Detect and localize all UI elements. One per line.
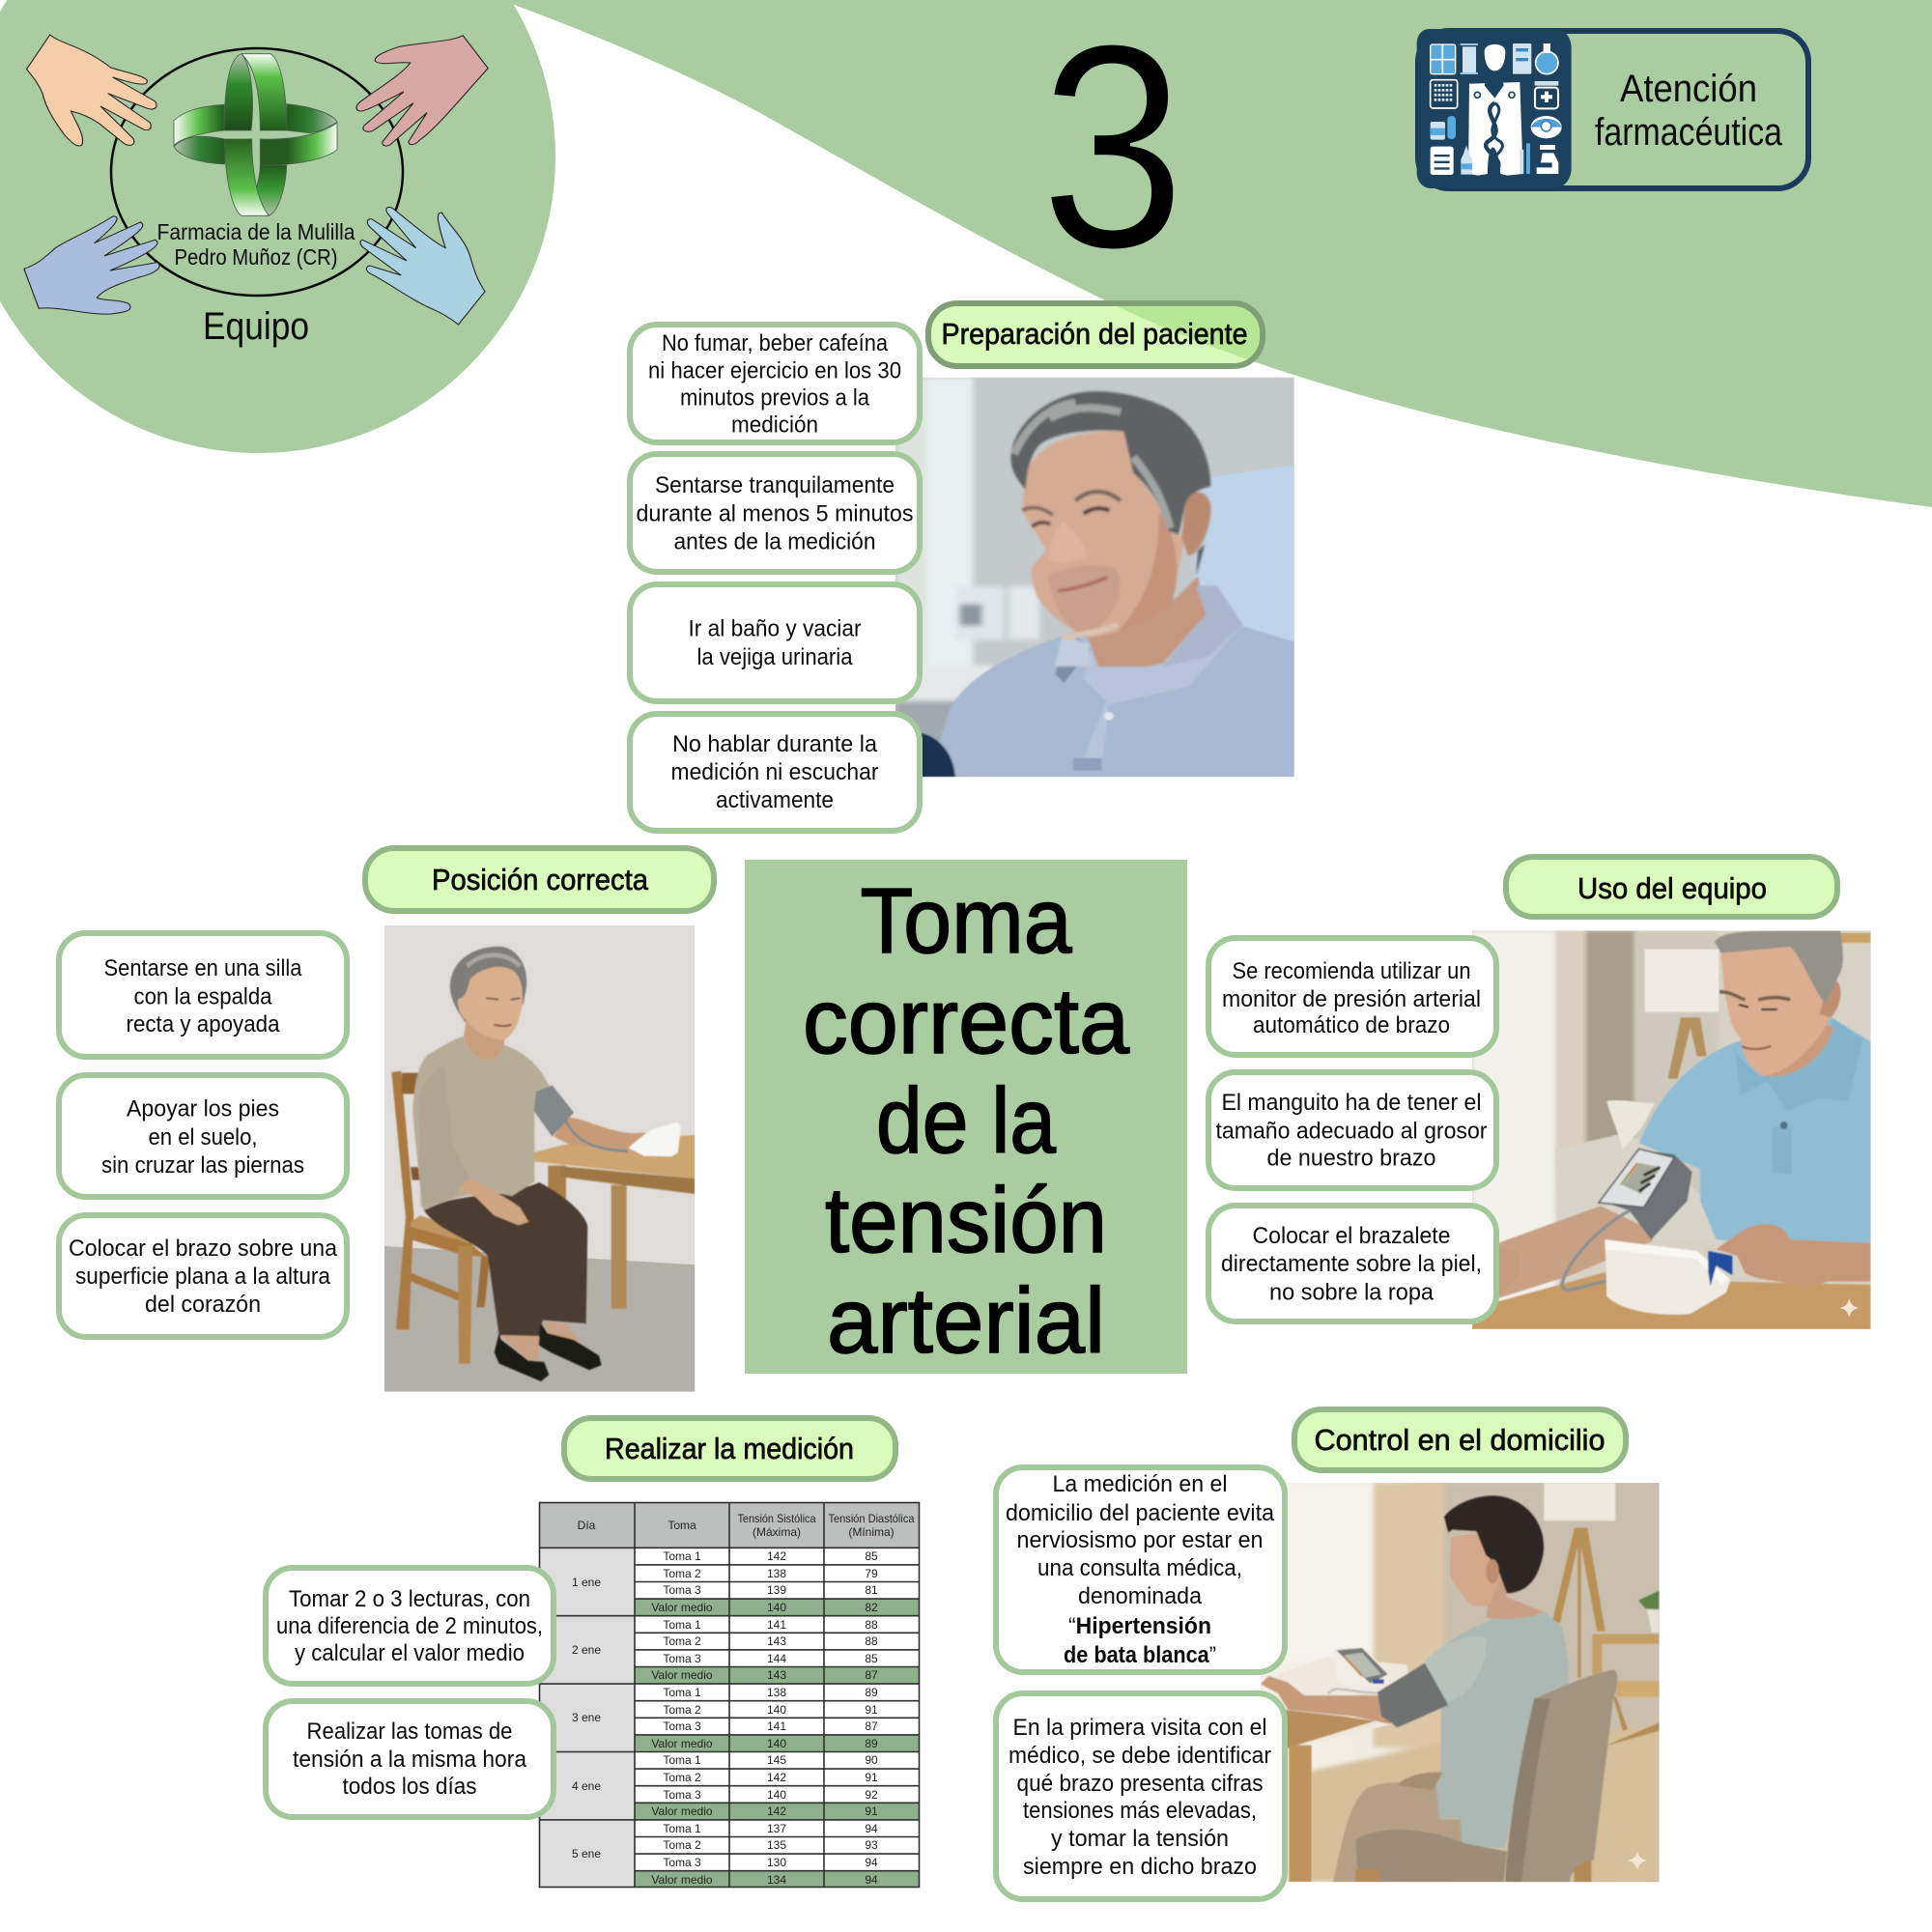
table rows: 138 xyxy=(767,1686,786,1699)
tip: empty bladder xyxy=(630,584,920,701)
tip: white coat hypertension: domicilio del paciente evita xyxy=(1006,1500,1275,1526)
table rows: 94 xyxy=(865,1856,878,1869)
icon: sparkle xyxy=(1839,1298,1859,1318)
tip: readings: Tomar 2 o 3 lecturas, con xyxy=(289,1586,530,1612)
tip: arm: Colocar el brazo sobre una xyxy=(69,1236,338,1262)
tip: cuff size xyxy=(1208,1072,1496,1188)
man's head xyxy=(1010,391,1243,667)
badge: Atención farmacéutica xyxy=(1417,29,1808,188)
hand xyxy=(1717,1224,1871,1288)
table rows: 85 xyxy=(865,1549,878,1563)
table rows: 88 xyxy=(865,1634,878,1648)
table rows: 134 xyxy=(767,1873,786,1887)
table day labels: 1 ene xyxy=(572,1576,601,1589)
table rows: 140 xyxy=(767,1788,786,1802)
table rows: 140 xyxy=(767,1703,786,1717)
tip: chair: Sentarse en una silla xyxy=(104,955,302,981)
table rows: Toma 2 xyxy=(663,1703,701,1717)
table rows: Valor medio xyxy=(651,1601,713,1614)
tip: first visit: En la primera visita con el xyxy=(1012,1715,1267,1741)
table rows: 142 xyxy=(767,1549,786,1563)
table rows: 93 xyxy=(865,1838,878,1852)
table rows: 89 xyxy=(865,1686,878,1699)
tip: monitor: automático de brazo xyxy=(1253,1012,1450,1038)
icon: pink hand xyxy=(356,36,488,146)
table header: Toma xyxy=(668,1519,696,1532)
table rows: 91 xyxy=(865,1804,878,1818)
tip: readings xyxy=(266,1568,554,1684)
tip: white coat hypertension: denominada xyxy=(1078,1583,1203,1609)
table rows: Valor medio xyxy=(651,1668,713,1682)
shirt xyxy=(1639,1016,1871,1253)
table rows: 92 xyxy=(865,1788,878,1802)
icon: green ribbon cross xyxy=(174,54,337,215)
tip: do not talk: No hablar durante la xyxy=(672,731,878,757)
table rows: 87 xyxy=(865,1719,878,1733)
photo: patient preparing, smiling man xyxy=(895,378,1294,777)
title text: tensión xyxy=(825,1169,1107,1272)
heading: Uso del equipo xyxy=(1506,857,1837,917)
table rows: 144 xyxy=(767,1652,786,1665)
tip: feet: Apoyar los pies xyxy=(127,1095,279,1122)
tip: same hour: todos los días xyxy=(342,1774,477,1800)
table header: Día xyxy=(578,1519,596,1532)
tip: first visit: tensiones más elevadas, xyxy=(1023,1798,1257,1824)
logo text xyxy=(156,219,355,270)
shirt xyxy=(1427,1611,1569,1848)
panel: position tips xyxy=(59,933,347,1337)
table header: (Máxima) xyxy=(753,1525,801,1539)
table rows: 141 xyxy=(767,1618,786,1632)
table rows: 90 xyxy=(865,1753,878,1767)
table rows: Toma 3 xyxy=(663,1583,701,1597)
head xyxy=(1721,944,1833,1075)
heading: Control en el domicilio xyxy=(1294,1409,1626,1470)
tip: do not talk: medición ni escuchar xyxy=(670,759,879,785)
background shape: top-left green circle xyxy=(0,0,555,453)
icon: pharmacist icon panel xyxy=(1417,29,1572,188)
table rows: 139 xyxy=(767,1583,786,1597)
tip: do not talk: activamente xyxy=(716,787,834,813)
table rows: 137 xyxy=(767,1822,786,1835)
table rows: Toma 2 xyxy=(663,1567,701,1580)
tip: no smoking: ni hacer ejercicio en los 30 xyxy=(648,357,901,384)
tip: cuff on skin xyxy=(1208,1206,1496,1321)
table header: (Mínima) xyxy=(848,1525,895,1539)
table rows: Toma 3 xyxy=(663,1788,701,1802)
table rows: 94 xyxy=(865,1873,878,1887)
table rows: Toma 1 xyxy=(663,1618,701,1632)
table day labels: 4 ene xyxy=(572,1779,601,1793)
logo text: Farmacia de la Mulilla xyxy=(156,219,355,244)
table rows: Toma 1 xyxy=(663,1753,701,1767)
tip: readings: y calcular el valor medio xyxy=(295,1640,525,1666)
panel: home control tips xyxy=(996,1467,1285,1899)
tip: first visit: y tomar la tensión xyxy=(1051,1826,1229,1852)
tip: chair: recta y apoyada xyxy=(126,1011,280,1037)
table rows: 143 xyxy=(767,1668,786,1682)
heading: Realizar la medición: Realizar la medición xyxy=(605,1432,854,1465)
tip: monitor xyxy=(1208,938,1496,1055)
chair back legs and slats xyxy=(391,1071,413,1330)
table rows: 85 xyxy=(865,1652,878,1665)
logo caption: Equipo xyxy=(203,305,309,348)
badge text: farmacéutica xyxy=(1595,111,1783,154)
icon: light blue hand xyxy=(360,208,485,325)
tip: no smoking: minutos previos a la xyxy=(680,384,870,412)
badge text xyxy=(1595,68,1783,154)
badge text: Atención xyxy=(1620,68,1757,110)
table rows: Valor medio xyxy=(651,1737,713,1750)
tip: same hour xyxy=(266,1701,554,1817)
table rows: Toma 3 xyxy=(663,1856,701,1869)
monitor xyxy=(629,1122,681,1156)
tip: white coat hypertension: “Hipertensión xyxy=(1068,1613,1211,1639)
title text: Toma xyxy=(860,869,1072,973)
table rows: 135 xyxy=(767,1838,786,1852)
head xyxy=(450,947,526,1022)
panel: equipment tips xyxy=(1208,938,1496,1321)
table rows: 142 xyxy=(767,1771,786,1784)
table: blood pressure readings xyxy=(539,1502,920,1888)
table rows: 138 xyxy=(767,1567,786,1580)
tip: arm: superficie plana a la altura xyxy=(75,1264,331,1290)
table header: Tensión Diastólica xyxy=(829,1512,915,1525)
tip: cuff on skin: directamente sobre la piel, xyxy=(1221,1251,1482,1277)
table rows: Toma 2 xyxy=(663,1838,701,1852)
title text xyxy=(803,869,1130,1373)
tip: feet: sin cruzar las piernas xyxy=(101,1152,304,1179)
cuff xyxy=(1378,1663,1448,1727)
table day labels: 3 ene xyxy=(572,1711,601,1724)
tip: feet: en el suelo, xyxy=(149,1124,257,1151)
table rows: 91 xyxy=(865,1771,878,1784)
title text: de la xyxy=(876,1069,1057,1173)
cuff xyxy=(1612,1151,1692,1240)
tip: do not talk xyxy=(630,714,920,831)
sweater xyxy=(412,1037,551,1210)
table rows: 141 xyxy=(767,1719,786,1733)
white box xyxy=(1605,1239,1731,1315)
tip: sit quietly: antes de la medición xyxy=(674,529,875,554)
title text: arterial xyxy=(827,1269,1105,1373)
shoes xyxy=(495,1333,549,1381)
monitor on cuff xyxy=(1599,1149,1674,1208)
tip: cuff on skin: Colocar el brazalete xyxy=(1252,1223,1451,1249)
tip: same hour: tensión a la misma hora xyxy=(293,1747,527,1773)
tip: monitor: monitor de presión arterial xyxy=(1222,986,1481,1012)
table rows: 87 xyxy=(865,1668,878,1682)
logo text: Pedro Muñoz (CR) xyxy=(174,244,338,270)
table rows: Toma 1 xyxy=(663,1686,701,1699)
arm xyxy=(1261,1676,1391,1724)
trousers xyxy=(423,1182,587,1336)
legs xyxy=(1333,1782,1462,1882)
tip: sit quietly: Sentarse tranquilamente xyxy=(655,472,895,498)
table rows: 140 xyxy=(767,1601,786,1614)
table rows: 140 xyxy=(767,1737,786,1750)
cuff xyxy=(534,1085,574,1137)
heading: Preparación del paciente xyxy=(928,303,1263,366)
heading: Preparación del paciente: Preparación del paciente xyxy=(941,317,1248,351)
tip: readings: una diferencia de 2 minutos, xyxy=(276,1613,543,1639)
icon: peach hand xyxy=(27,35,156,146)
logo: Farmacia de la Mulilla team xyxy=(24,35,488,348)
icon: sparkle xyxy=(1628,1851,1647,1870)
tip: first visit xyxy=(996,1693,1285,1899)
tip: cuff on skin: no sobre la ropa xyxy=(1269,1279,1435,1306)
tip: arm xyxy=(59,1215,347,1337)
logo ring xyxy=(111,48,403,296)
table day labels: 2 ene xyxy=(572,1643,601,1657)
tip: empty bladder: la vejiga urinaria xyxy=(697,644,853,670)
tip: white coat hypertension: nerviosismo por estar en xyxy=(1016,1527,1264,1553)
photo: woman measuring at home xyxy=(1261,1483,1660,1882)
photo: man using blood-pressure monitor xyxy=(1472,930,1871,1329)
tip: white coat hypertension xyxy=(996,1467,1285,1672)
panel: measurement tips xyxy=(266,1568,554,1817)
table header xyxy=(578,1512,915,1539)
neck and head xyxy=(1486,1576,1544,1619)
tip: cuff size: El manguito ha de tener el xyxy=(1221,1090,1482,1116)
table rows: Toma 3 xyxy=(663,1719,701,1733)
icon: blue hand xyxy=(24,216,159,314)
table rows: 130 xyxy=(767,1856,786,1869)
tip: chair: con la espalda xyxy=(133,983,272,1010)
tip: chair xyxy=(59,933,347,1057)
table rows: 143 xyxy=(767,1634,786,1648)
table rows: 89 xyxy=(865,1737,878,1750)
arm and hand xyxy=(554,1118,645,1150)
table rows xyxy=(651,1549,878,1887)
panel: main title xyxy=(745,860,1187,1374)
table rows: 145 xyxy=(767,1753,786,1767)
table header: Tensión Sistólica xyxy=(738,1512,816,1525)
table rows: 82 xyxy=(865,1601,878,1614)
heading: Realizar la medición xyxy=(564,1418,895,1479)
tip: cuff size: tamaño adecuado al grosor xyxy=(1215,1119,1488,1144)
tip: same hour: Realizar las tomas de xyxy=(307,1719,512,1745)
table rows: Toma 1 xyxy=(663,1822,701,1835)
table rows: 88 xyxy=(865,1618,878,1632)
table rows: Toma 1 xyxy=(663,1549,701,1563)
panel: preparation tips xyxy=(630,325,920,831)
tip: no smoking xyxy=(630,325,920,442)
tip: sit quietly: durante al menos 5 minutos xyxy=(636,500,914,527)
photo: elderly woman seated in correct position xyxy=(384,925,695,1392)
tube xyxy=(1562,1210,1630,1290)
chair xyxy=(1355,1830,1507,1882)
tip: white coat hypertension: una consulta médica, xyxy=(1037,1555,1242,1581)
tip: monitor: Se recomienda utilizar un xyxy=(1233,958,1470,984)
tip: white coat hypertension: de bata blanca” xyxy=(1064,1642,1216,1668)
tip: no smoking: No fumar, beber cafeína xyxy=(662,330,889,356)
tip: first visit: qué brazo presenta cifras xyxy=(1016,1771,1264,1797)
table rows: 94 xyxy=(865,1822,878,1835)
table xyxy=(1265,1657,1413,1748)
table xyxy=(548,1166,566,1205)
heading: Uso del equipo: Uso del equipo xyxy=(1577,871,1767,905)
tip: no smoking: medición xyxy=(731,412,818,439)
tip: empty bladder: Ir al baño y vaciar xyxy=(688,616,862,641)
table day labels: 5 ene xyxy=(572,1847,601,1861)
monitor xyxy=(1335,1649,1388,1690)
table rows: Toma 3 xyxy=(663,1652,701,1665)
tip: first visit: médico, se debe identificar xyxy=(1009,1743,1271,1769)
table rows: 79 xyxy=(865,1567,878,1580)
table rows: Valor medio xyxy=(651,1804,713,1818)
arm xyxy=(1499,1206,1654,1298)
table rows: 142 xyxy=(767,1804,786,1818)
heading: Control en el domicilio: Control en el domicilio xyxy=(1314,1423,1605,1457)
table rows: Toma 2 xyxy=(663,1634,701,1648)
tip: arm: del corazón xyxy=(145,1292,261,1318)
tip: feet xyxy=(59,1075,347,1197)
tip: white coat hypertension: La medición en el xyxy=(1053,1471,1227,1497)
heading: Posición correcta xyxy=(365,848,714,911)
title text: correcta xyxy=(803,970,1130,1073)
table rows: Toma 2 xyxy=(663,1771,701,1784)
background shape: top-right green swoosh xyxy=(501,0,1932,507)
table rows: Valor medio xyxy=(651,1873,713,1887)
tip: sit quietly xyxy=(630,454,920,572)
tip: first visit: siempre en dicho brazo xyxy=(1023,1854,1257,1880)
table rows: 81 xyxy=(865,1583,878,1597)
chair seat xyxy=(410,1215,468,1242)
table rows: 91 xyxy=(865,1703,878,1717)
table day labels xyxy=(572,1576,601,1861)
heading: Posición correcta: Posición correcta xyxy=(432,863,649,896)
tip: cuff size: de nuestro brazo xyxy=(1267,1146,1435,1171)
